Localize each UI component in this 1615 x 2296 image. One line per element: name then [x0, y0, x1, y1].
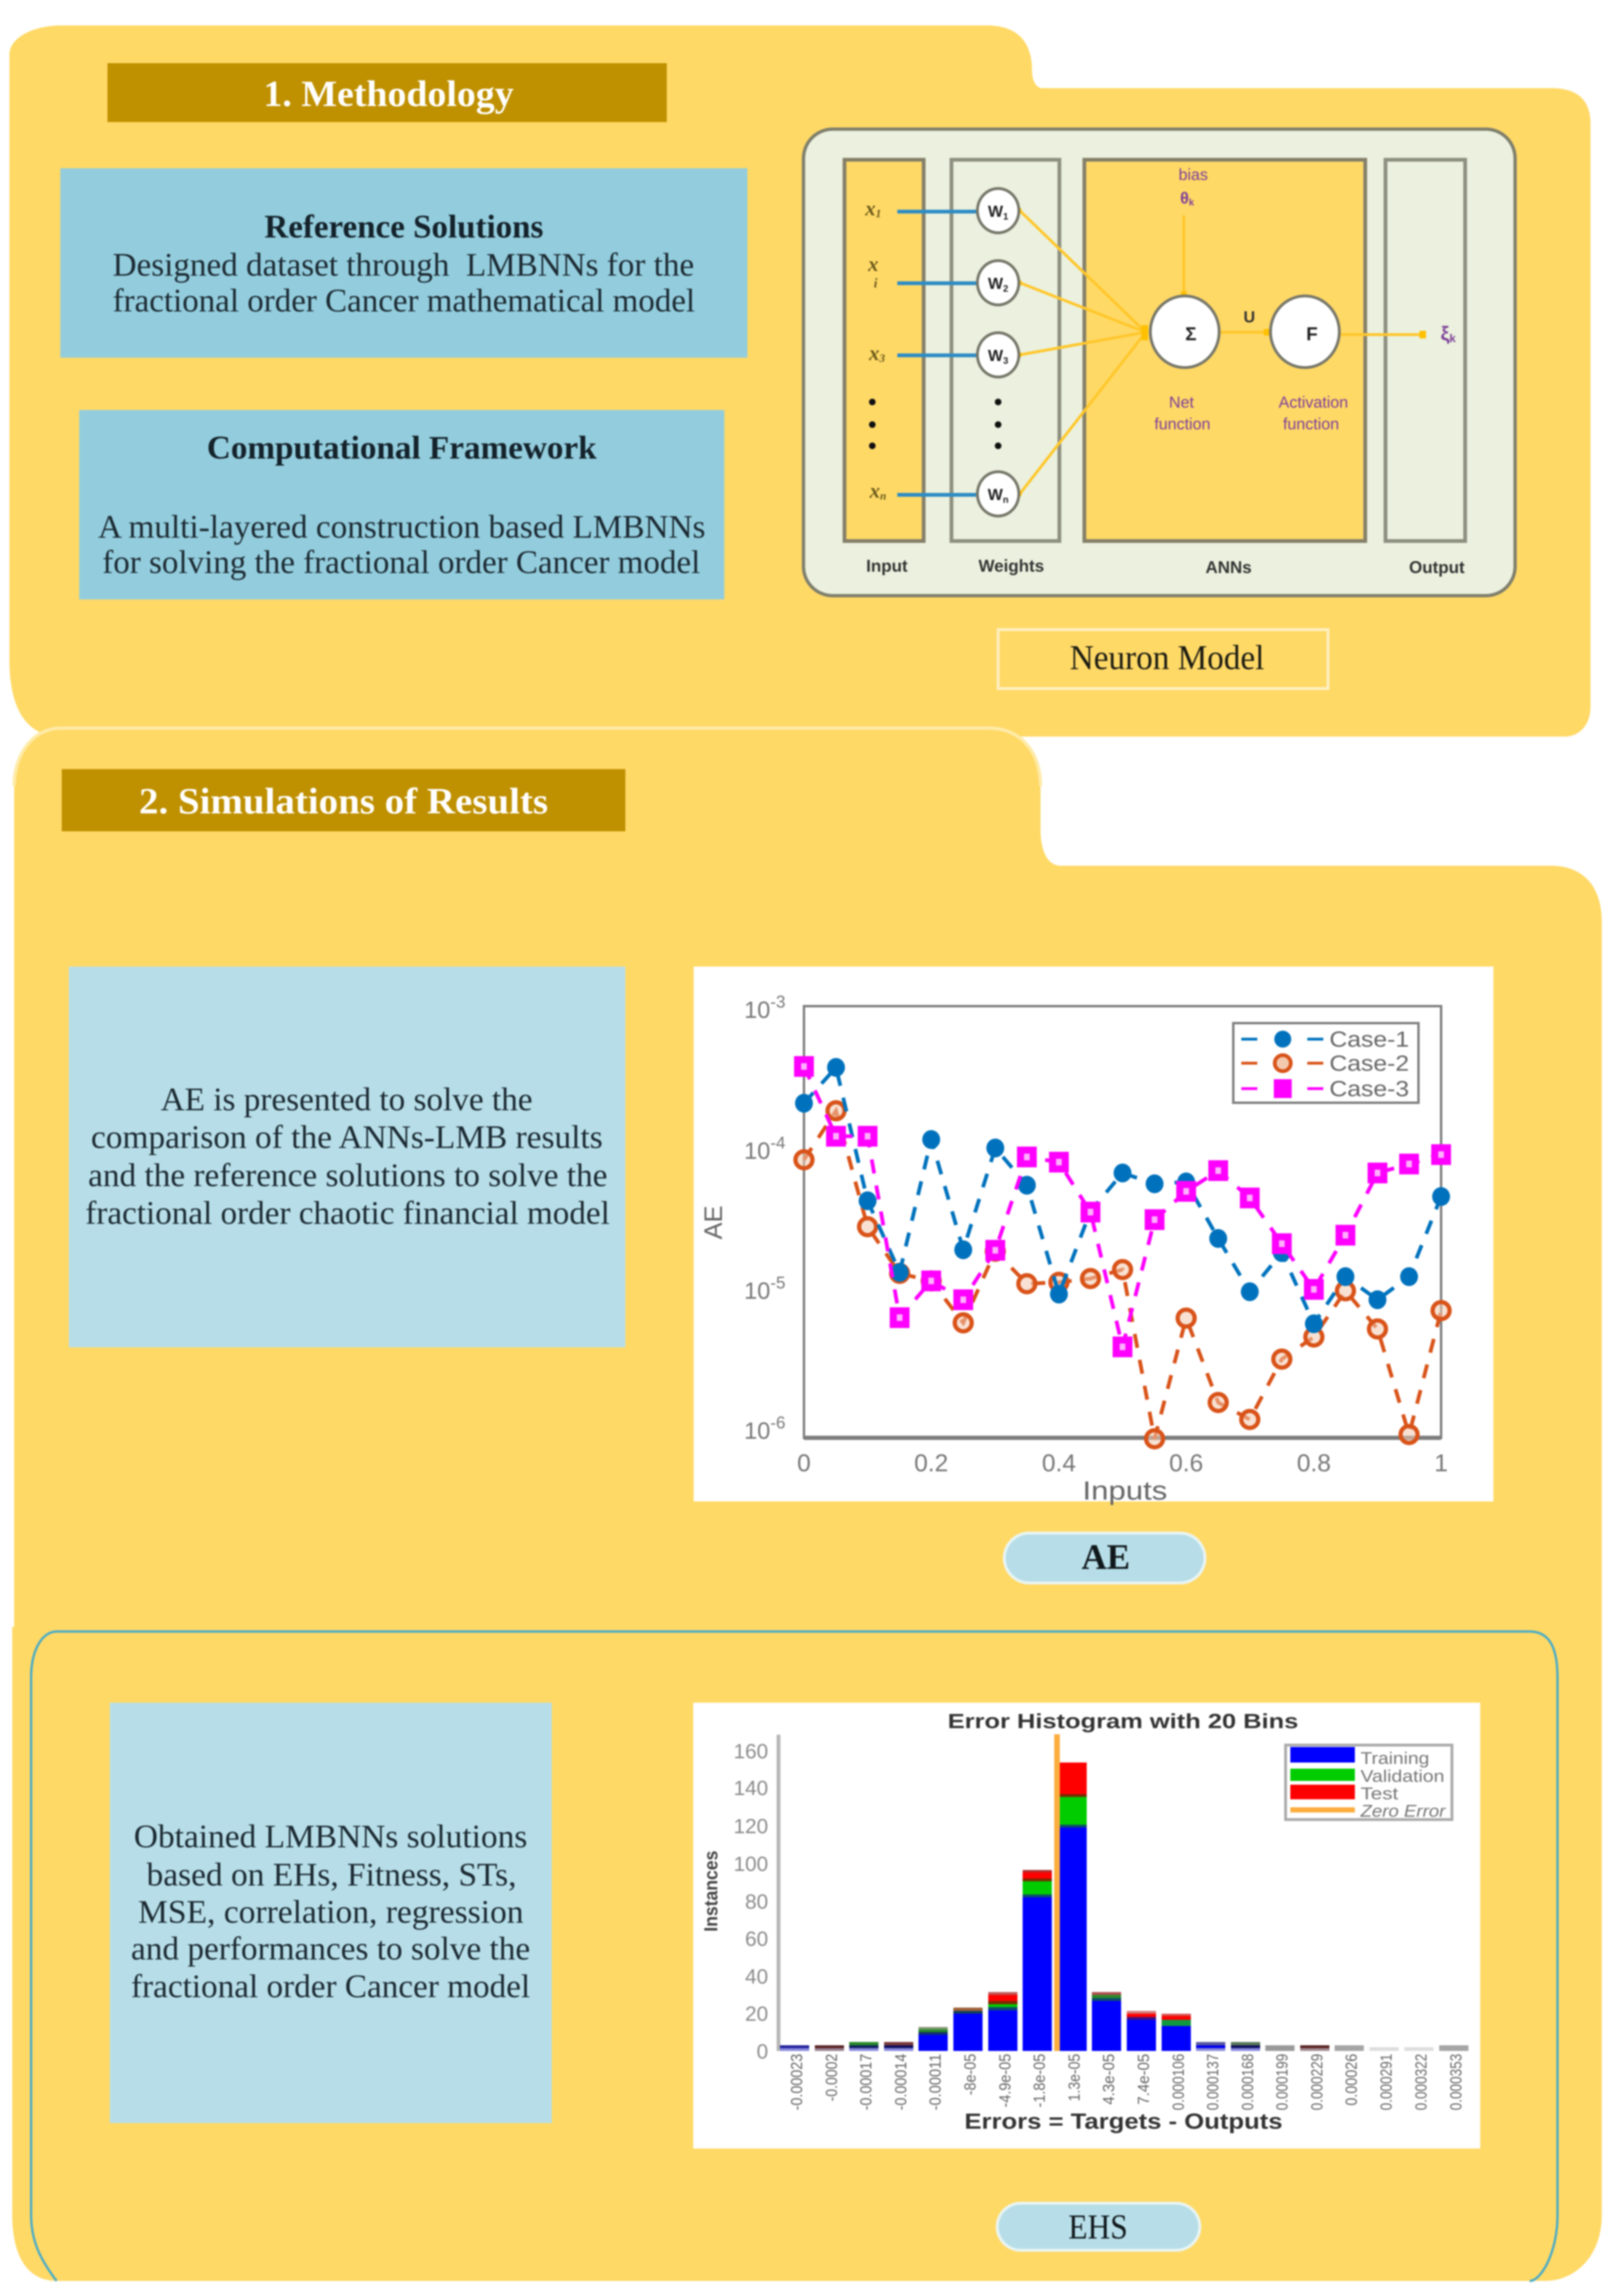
- legend: [1286, 1745, 1452, 1820]
- x tick labels: -1.8e-05: [1031, 2054, 1049, 2107]
- legend: Case-1: [1329, 1027, 1409, 1051]
- log axis labels: [744, 992, 786, 1444]
- zero error line: [1054, 1734, 1060, 2051]
- x tick labels: 0.000137: [1204, 2054, 1222, 2110]
- x tick labels: 0.000168: [1239, 2054, 1257, 2110]
- log axis labels: 10: [744, 1138, 771, 1164]
- y tick labels: 0: [757, 2040, 768, 2063]
- x tick labels: 0.000291: [1377, 2054, 1395, 2110]
- weight nodes: [977, 189, 1019, 516]
- column captions: ANNs: [1205, 558, 1252, 577]
- y axis title: Instances: [701, 1851, 721, 1932]
- node and bias labels: function: [1283, 415, 1339, 433]
- plot frame: [804, 1006, 1441, 1438]
- text block: AE description: and the reference solutions to solve the: [88, 1157, 607, 1194]
- label: AE: [1004, 1533, 1205, 1583]
- weight labels: W: [988, 275, 1003, 293]
- y tick labels: 140: [734, 1777, 768, 1800]
- column: ANNs: [1084, 160, 1365, 541]
- legend: Training: [1361, 1748, 1429, 1768]
- diagram: neuron model: [803, 129, 1515, 596]
- log axis labels: -3: [771, 992, 786, 1011]
- node and bias labels: [1154, 166, 1456, 433]
- x tick labels: 0.00026: [1343, 2054, 1361, 2106]
- x tick labels: -0.00017: [857, 2054, 875, 2110]
- activation function node: [1271, 296, 1339, 368]
- legend: Validation: [1361, 1766, 1444, 1786]
- input labels: 3: [879, 353, 885, 365]
- text block: computational framework: [79, 410, 724, 599]
- y tick labels: 40: [745, 1965, 768, 1988]
- ellipsis dots: [869, 399, 1001, 449]
- y tick labels: 160: [734, 1740, 768, 1763]
- caption: neuron model: Neuron Model: [1070, 639, 1264, 677]
- input labels: x: [869, 479, 880, 502]
- log axis labels: -5: [771, 1273, 786, 1292]
- node and bias labels: U: [1244, 308, 1255, 326]
- series: Case-2: [804, 1111, 1441, 1439]
- legend: Test: [1361, 1784, 1398, 1803]
- weight labels: W: [988, 203, 1003, 221]
- connections: weights to net function: [1020, 211, 1424, 494]
- log axis labels: -6: [771, 1413, 786, 1432]
- x tick labels: -0.00023: [788, 2054, 806, 2110]
- node and bias labels: function: [1154, 415, 1211, 433]
- column: output: [1385, 160, 1465, 541]
- log axis labels: 10: [744, 1418, 771, 1444]
- text block: EHS description: and performances to solve the: [131, 1931, 530, 1967]
- x tick labels: -0.00011: [926, 2054, 944, 2110]
- histogram bars: [780, 1763, 1468, 2051]
- y axis title: AE: [699, 1205, 728, 1239]
- column captions: Weights: [978, 556, 1044, 575]
- heading: 2. Simulations of Results: 2. Simulations of Results: [139, 780, 548, 821]
- legend: Case-2: [1329, 1051, 1409, 1075]
- text block: computational framework: for solving the fractional order Cancer model: [102, 544, 700, 581]
- column: input: [844, 160, 924, 541]
- node and bias labels: Σ: [1185, 324, 1197, 344]
- text block: reference solutions: [60, 168, 747, 358]
- text block: reference solutions: Reference Solutions: [264, 209, 543, 245]
- chart: absolute error by input: [694, 967, 1493, 1505]
- log axis labels: -4: [771, 1133, 786, 1152]
- axis tick labels: 1: [1435, 1450, 1448, 1477]
- node and bias labels: ξ: [1441, 322, 1450, 344]
- text block: reference solutions: Designed dataset through LMBNNs for the: [113, 247, 694, 283]
- x axis title: Errors = Targets - Outputs: [964, 2109, 1283, 2133]
- x tick labels: 0.000106: [1170, 2054, 1188, 2110]
- input labels: n: [880, 490, 886, 502]
- label: EHS: EHS: [1068, 2208, 1128, 2247]
- x tick labels: -4.9e-05: [996, 2054, 1014, 2107]
- axis tick labels: 0: [797, 1450, 811, 1477]
- node and bias labels: θ: [1180, 189, 1189, 207]
- legend: Case-3: [1329, 1076, 1409, 1101]
- x axis title: Inputs: [1082, 1476, 1167, 1505]
- text block: EHS description: fractional order Cancer model: [131, 1968, 530, 2005]
- y axis: [777, 1735, 780, 2051]
- weight labels: [988, 203, 1008, 505]
- column captions: [866, 556, 1465, 577]
- weight labels: n: [1003, 495, 1008, 505]
- text block: computational framework: Computational Framework: [207, 430, 597, 466]
- text block: EHS description: [110, 1703, 552, 2123]
- x tick labels: 0.000322: [1412, 2054, 1430, 2110]
- column: weights: [951, 160, 1059, 541]
- y tick labels: [734, 1740, 768, 2063]
- chart title: Error Histogram with 20 Bins: [948, 1710, 1298, 1733]
- column captions: Output: [1409, 558, 1465, 577]
- legend: Zero Error: [1360, 1801, 1446, 1820]
- input labels: 1: [876, 208, 881, 220]
- text block: AE description: AE is presented to solve the: [161, 1082, 533, 1118]
- y tick labels: 20: [745, 2002, 768, 2025]
- x tick labels: 7.4e-05: [1135, 2054, 1153, 2105]
- input labels: x: [869, 342, 879, 365]
- heading: 2. Simulations of Results: [62, 769, 625, 831]
- panel: error histogram section outline: [31, 1632, 1558, 2281]
- x tick labels: 1.3e-05: [1066, 2054, 1083, 2101]
- x tick labels: -0.00014: [892, 2054, 910, 2110]
- series: Case-3: [804, 1066, 1441, 1347]
- node and bias labels: Activation: [1279, 394, 1348, 411]
- series: Case-1: [804, 1067, 1441, 1324]
- input labels: x: [868, 253, 878, 276]
- text block: EHS description: Obtained LMBNNs solutions: [134, 1819, 527, 1855]
- node and bias labels: Net: [1169, 394, 1194, 411]
- weight labels: 2: [1003, 284, 1008, 294]
- heading: 1. Methodology: [107, 63, 667, 122]
- log axis labels: 10: [744, 1278, 771, 1304]
- node and bias labels: k: [1189, 197, 1195, 208]
- axis tick labels: 0.8: [1297, 1450, 1331, 1477]
- text block: EHS description: based on EHs, Fitness, STs,: [147, 1857, 516, 1893]
- y tick labels: 60: [745, 1927, 768, 1951]
- y tick labels: 80: [745, 1890, 768, 1913]
- axis tick labels: [797, 1450, 1448, 1477]
- panel top highlight: [14, 728, 1041, 786]
- weight labels: 1: [1003, 212, 1008, 222]
- caption: neuron model: [998, 630, 1328, 689]
- x tick labels: 0.000353: [1447, 2054, 1465, 2110]
- chart: error histogram: [693, 1703, 1480, 2148]
- heading: 1. Methodology: 1. Methodology: [263, 73, 514, 114]
- legend: [1233, 1023, 1418, 1103]
- x tick labels: [788, 2054, 1465, 2110]
- y tick labels: 100: [734, 1853, 768, 1876]
- weight labels: W: [988, 347, 1003, 365]
- panel: simulations of results background: [12, 728, 1602, 2281]
- node and bias labels: k: [1450, 332, 1456, 345]
- input labels: [865, 197, 886, 502]
- weight labels: 3: [1003, 356, 1008, 366]
- node and bias labels: F: [1306, 324, 1318, 344]
- text block: computational framework: A multi-layered construction based LMBNNs: [98, 509, 705, 545]
- text block: AE description: comparison of the ANNs-LMB results: [91, 1119, 603, 1156]
- label: EHS: [997, 2203, 1200, 2250]
- axis tick labels: 0.6: [1169, 1450, 1203, 1477]
- arrowheads: [1014, 207, 1426, 498]
- text block: EHS description: MSE, correlation, regression: [138, 1894, 524, 1930]
- text block: AE description: [69, 967, 625, 1347]
- input arrows: [897, 212, 977, 495]
- panel: methodology background: [9, 25, 1590, 737]
- column captions: Input: [866, 556, 908, 575]
- net function node: [1150, 296, 1219, 368]
- y tick labels: 120: [734, 1815, 768, 1838]
- x tick labels: 0.000229: [1308, 2054, 1326, 2110]
- x tick labels: -0.0002: [823, 2054, 841, 2101]
- log axis labels: 10: [744, 997, 771, 1023]
- x tick labels: -8e-05: [961, 2054, 979, 2095]
- input labels: x: [865, 197, 876, 220]
- x tick labels: 0.000199: [1273, 2054, 1291, 2110]
- input labels: i: [874, 276, 877, 291]
- text block: AE description: fractional order chaotic financial model: [85, 1195, 610, 1231]
- text block: reference solutions: fractional order Cancer mathematical model: [113, 283, 695, 319]
- weight labels: W: [988, 486, 1003, 504]
- label: AE: AE: [1082, 1537, 1130, 1577]
- axis tick labels: 0.4: [1042, 1450, 1076, 1477]
- axis tick labels: 0.2: [914, 1450, 948, 1477]
- x tick labels: 4.3e-05: [1100, 2054, 1118, 2105]
- node and bias labels: bias: [1179, 166, 1208, 184]
